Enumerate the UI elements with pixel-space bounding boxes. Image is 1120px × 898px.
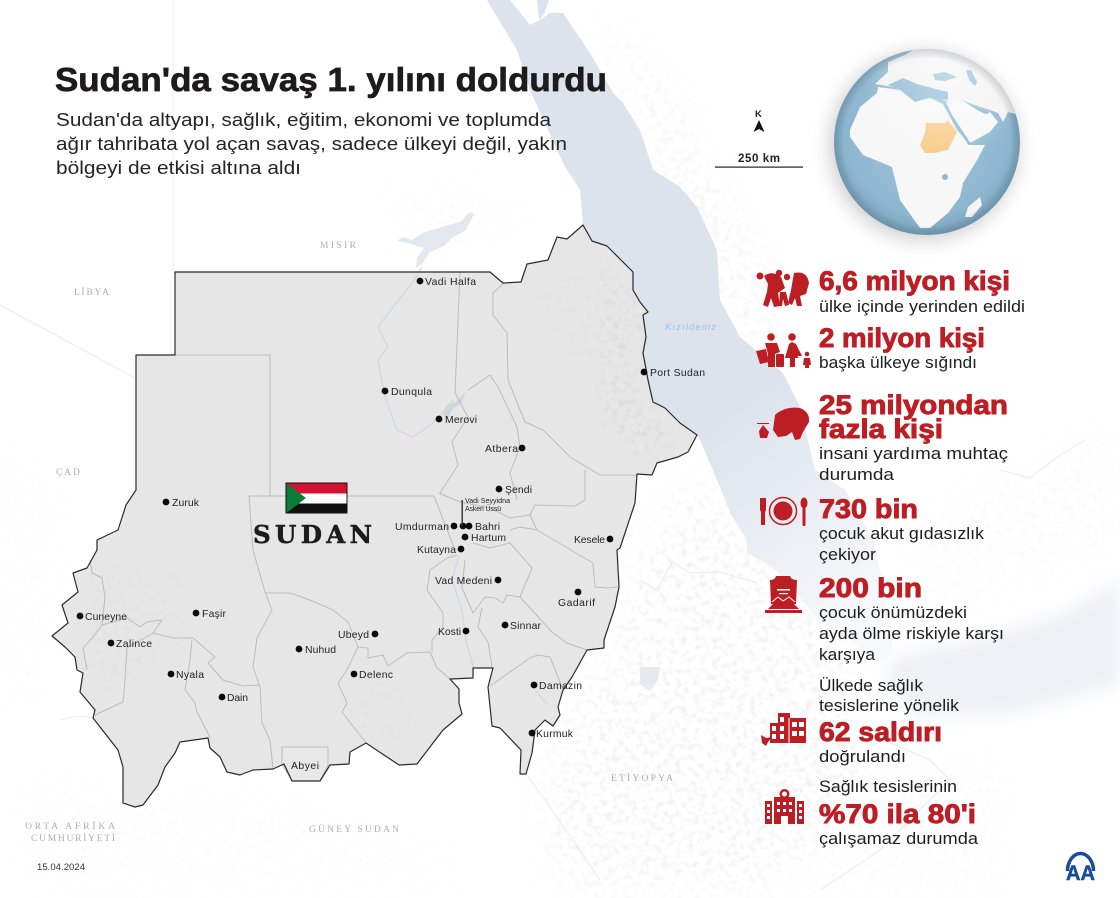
logo: AA: AA	[1066, 862, 1095, 885]
stat: risk of death: karşıya	[819, 646, 876, 664]
stat: risk of death	[765, 573, 1004, 664]
country labels: ÇAD	[56, 468, 80, 478]
icon: child at risk	[765, 576, 802, 613]
city markers: Nuhud	[305, 645, 336, 656]
city markers: Ubeyd	[338, 630, 369, 641]
country labels: ORTA AFRİKA	[25, 820, 115, 832]
Abyei region	[282, 747, 328, 781]
stat: people in need: durumda	[819, 466, 895, 484]
Sudan land	[52, 225, 697, 807]
icon: hospital	[765, 789, 804, 824]
stat: risk of death: ayda ölme riskiyle karşı	[819, 625, 1004, 643]
city markers: Port Sudan	[650, 368, 705, 379]
icon: person with bag kneeling	[757, 408, 809, 440]
city markers: Atbera	[485, 444, 518, 455]
city markers: Faşir	[202, 609, 227, 620]
date: 15.04.2024	[37, 862, 85, 873]
stat: people in need: 25 milyondan	[819, 390, 1008, 420]
city markers: Delenc	[359, 670, 393, 681]
stat: non-functional facilities: çalışamaz durumda	[819, 830, 979, 848]
Arabia land	[946, 100, 998, 143]
city markers: Zuruk	[172, 498, 200, 509]
city markers: Kesele	[574, 535, 605, 546]
city markers: Damazin	[539, 681, 582, 692]
Red Sea	[487, 0, 893, 662]
icon: family with luggage	[756, 333, 811, 368]
Lake Victoria	[942, 174, 948, 180]
stat: attacks on health facilities: 62 saldırı	[819, 717, 942, 747]
scale bar: 250 km	[738, 153, 780, 165]
stat: people in need: fazla kişi	[819, 414, 943, 444]
stat: attacks on health facilities: Ülkede sağlık	[819, 677, 924, 695]
north arrow	[754, 109, 764, 132]
stat: acute hunger: 730 bin	[819, 494, 918, 524]
Gulf of Aqaba	[537, 0, 549, 20]
stat: acute hunger: çocuk akut gıdasızlık	[819, 525, 985, 543]
rivers	[378, 267, 548, 705]
city markers: Askeri Üssü	[465, 505, 501, 513]
city markers: Şendi	[505, 485, 532, 496]
subtitle	[56, 110, 567, 178]
stat: attacks on health facilities: doğrulandı	[819, 748, 906, 766]
scale bar	[715, 153, 803, 168]
stat: attacks on health facilities	[761, 677, 960, 766]
Sudan outer border	[52, 225, 697, 807]
city markers: Vadi Seyyidna	[465, 498, 510, 505]
city markers: Kutayna	[417, 545, 456, 556]
stat: risk of death: 200 bin	[819, 573, 922, 603]
Black Sea	[933, 72, 957, 81]
stat: refugees	[756, 323, 985, 372]
Gulf of Aden	[885, 580, 1120, 718]
city markers: Dunqula	[391, 387, 432, 398]
globe shadow	[829, 51, 1019, 241]
city markers: Gadarif	[558, 598, 595, 609]
subtitle: ağır tahribata yol açan savaş, sadece ülkeyi değil, yakın	[56, 134, 567, 154]
Red Sea	[944, 105, 971, 145]
stat: acute hunger	[760, 494, 985, 564]
stat: people in need	[757, 390, 1008, 484]
country labels: CUMHURİYETİ	[31, 832, 115, 844]
stat: acute hunger: çekiyor	[819, 546, 877, 564]
city markers: Zalince	[116, 639, 152, 650]
stat: attacks on health facilities: tesislerine yönelik	[819, 697, 960, 715]
stat: non-functional facilities	[765, 778, 979, 848]
gloss	[871, 50, 1010, 143]
country labels: ETİYOPYA	[611, 772, 673, 784]
Eurasia land	[875, 49, 1016, 122]
city markers: Vad Medeni	[435, 576, 492, 587]
stat: non-functional facilities: %70 ila 80'i	[819, 799, 976, 829]
city markers: Nyala	[176, 670, 204, 681]
terrain texture	[552, 108, 854, 883]
Madagascar	[965, 197, 982, 217]
icon: damaged building	[761, 713, 806, 746]
city markers: Umdurman	[395, 522, 449, 533]
Sudan terrain	[606, 290, 660, 441]
city markers: Abyei	[291, 761, 319, 772]
city markers: Vadi Halfa	[425, 277, 476, 288]
stat: internally displaced: 6,6 milyon kişi	[819, 266, 1010, 296]
subtitle: bölgeyi de etkisi altına aldı	[56, 158, 301, 178]
stat: refugees: 2 milyon kişi	[819, 323, 985, 353]
Persian Gulf	[975, 105, 990, 114]
icon: plate fork spoon	[760, 498, 808, 526]
Sudan highlight	[920, 120, 957, 153]
Africa land	[850, 87, 985, 228]
Lake Nasser	[397, 212, 474, 268]
city markers: Cuneyne	[85, 612, 127, 623]
city markers: Merovi	[445, 415, 477, 426]
country name: SUDAN	[253, 520, 372, 549]
city markers: Hartum	[471, 533, 506, 544]
stat: internally displaced: ülke içinde yerinden edildi	[819, 298, 1025, 316]
locator globe	[829, 40, 1030, 241]
country labels: Kızıldeniz	[665, 322, 716, 333]
country labels: MISIR	[320, 241, 357, 251]
city markers: Kosti	[438, 627, 461, 638]
state borders	[83, 272, 637, 769]
Lake Tana	[640, 667, 660, 691]
icon: displaced family	[756, 270, 809, 307]
stat: non-functional facilities: Sağlık tesislerinin	[819, 778, 957, 796]
Mediterranean	[888, 78, 948, 101]
country labels: GÜNEY SUDAN	[309, 823, 399, 835]
stat: risk of death: çocuk önümüzdeki	[819, 604, 967, 622]
stat: refugees: başka ülkeye sığındı	[819, 354, 977, 372]
map: Sudan	[51, 224, 698, 808]
stat: internally displaced	[756, 266, 1025, 316]
Sudan flag	[286, 482, 348, 514]
title: Sudan'da savaş 1. yılını doldurdu	[55, 62, 607, 99]
city markers: Kurmuk	[536, 729, 574, 740]
subtitle: Sudan'da altyapı, sağlık, eğitim, ekonomi ve toplumda	[56, 110, 552, 130]
city markers: Dain	[227, 693, 248, 704]
stat: people in need: insani yardıma muhtaç	[819, 445, 1008, 463]
city markers	[77, 277, 705, 772]
country labels: LİBYA	[74, 286, 109, 298]
city markers: Sinnar	[510, 621, 542, 632]
ocean	[834, 49, 1020, 235]
north arrow: K	[755, 109, 762, 120]
country labels	[25, 241, 716, 844]
Caspian	[966, 70, 977, 86]
city markers: Bahri	[475, 522, 500, 533]
